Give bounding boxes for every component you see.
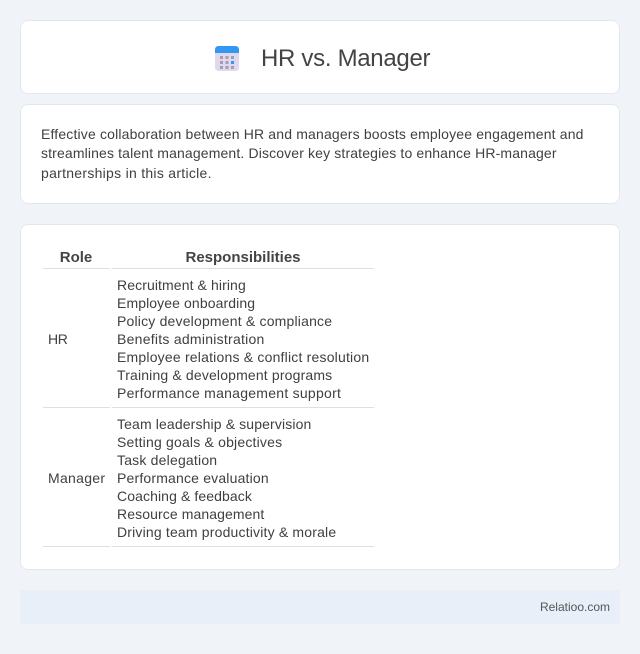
Manager responsibilities: Coaching & feedback xyxy=(117,488,252,504)
intro text: streamlines talent management. Discover key strategies to enhance HR-manager xyxy=(41,145,557,161)
HR responsibilities xyxy=(117,277,369,401)
panel: title card xyxy=(20,20,620,94)
HR responsibilities: Recruitment & hiring xyxy=(117,277,246,293)
footer credit: Relatioo.com xyxy=(540,600,610,614)
role: HR: HR xyxy=(48,331,68,347)
panel: comparison table xyxy=(20,224,620,570)
icon: calendar xyxy=(215,46,239,71)
Manager responsibilities: Driving team productivity & morale xyxy=(117,524,336,540)
HR responsibilities: Benefits administration xyxy=(117,331,265,347)
intro text xyxy=(41,126,584,181)
Manager responsibilities: Performance evaluation xyxy=(117,470,269,486)
title: HR vs. Manager xyxy=(261,45,430,72)
HR responsibilities: Policy development & compliance xyxy=(117,313,332,329)
intro text: partnerships in this article. xyxy=(41,165,212,181)
Manager responsibilities xyxy=(117,416,336,540)
table header: Role: Role xyxy=(60,249,92,266)
panel: introduction xyxy=(20,104,620,204)
Manager responsibilities: Task delegation xyxy=(117,452,217,468)
role: Manager: Manager xyxy=(48,470,105,486)
intro text: Effective collaboration between HR and managers boosts employee engagement and xyxy=(41,126,584,142)
footer bar xyxy=(20,590,620,624)
HR responsibilities: Employee onboarding xyxy=(117,295,255,311)
HR responsibilities: Training & development programs xyxy=(117,367,332,383)
Manager responsibilities: Resource management xyxy=(117,506,264,522)
Manager responsibilities: Team leadership & supervision xyxy=(117,416,311,432)
Manager responsibilities: Setting goals & objectives xyxy=(117,434,282,450)
HR responsibilities: Performance management support xyxy=(117,385,341,401)
table header: Responsibilities: Responsibilities xyxy=(185,249,301,266)
HR responsibilities: Employee relations & conflict resolution xyxy=(117,349,369,365)
